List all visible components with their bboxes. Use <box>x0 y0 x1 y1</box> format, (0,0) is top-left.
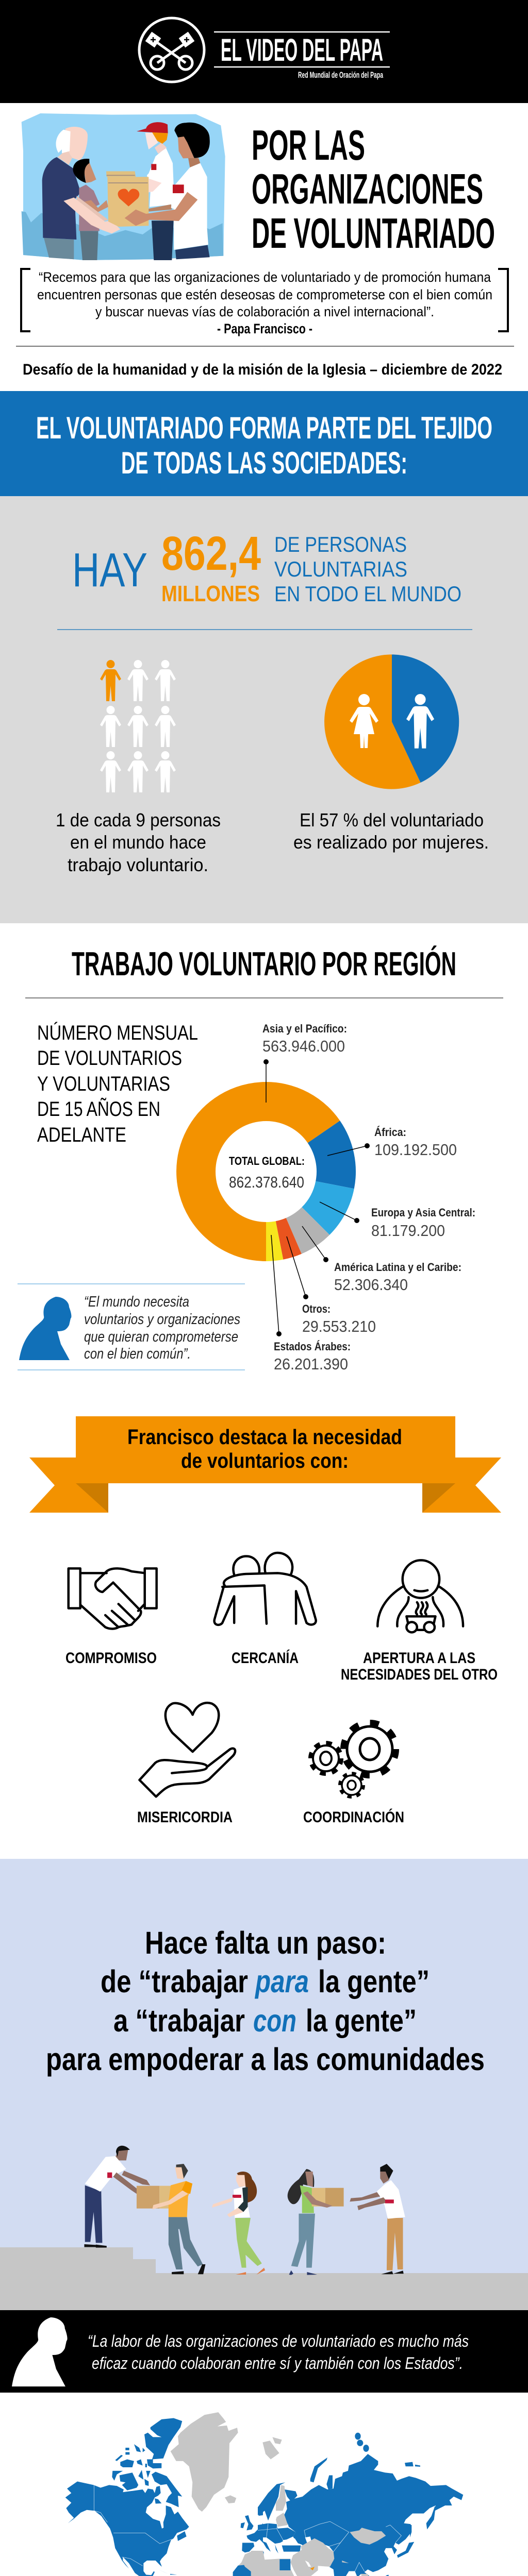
label: misericordia: MISERICORDIA <box>137 1809 233 1826</box>
Europe <box>258 2482 301 2560</box>
chart subtitle <box>37 1021 198 1146</box>
donut chart by region <box>196 1022 475 1373</box>
chart subtitle: NÚMERO MENSUAL <box>37 1021 198 1044</box>
big number statement <box>72 527 461 606</box>
person 1 <box>84 2146 150 2248</box>
label: Arab States: 26.201.390 <box>274 1355 348 1373</box>
banner: black quote <box>0 2310 528 2393</box>
title <box>252 121 495 257</box>
quote text <box>88 2332 469 2372</box>
Mongolia <box>350 2528 386 2545</box>
header band <box>0 0 528 103</box>
text: 57 percent: El 57 % del voluntariado <box>300 809 484 831</box>
pie chart: 57 % women <box>324 654 459 789</box>
label: Africa: África: <box>374 1126 406 1139</box>
label: Africa: 109.192.500 <box>374 1141 457 1159</box>
icon: handshake <box>69 1568 157 1629</box>
banner: blue heading <box>0 391 528 496</box>
stairs and ground <box>0 2247 528 2310</box>
West Africa <box>233 2551 263 2576</box>
icon: Pope silhouette blue <box>19 1297 71 1360</box>
label: Latin America <box>334 1261 461 1294</box>
prayer quote with brackets <box>21 269 508 336</box>
big number statement: VOLUNTARIAS <box>274 557 407 581</box>
label: Africa <box>374 1126 457 1159</box>
label: Asia: Asia y el Pacífico: <box>262 1022 347 1035</box>
text: 1 in 9: 1 de cada 9 personas <box>56 809 221 831</box>
label: Latin America: América Latina y el Caribe: <box>334 1261 461 1274</box>
chart subtitle: DE 15 AÑOS EN <box>37 1097 160 1121</box>
logo wordmark: EL VIDEO DEL PAPA <box>221 32 383 67</box>
statement text: para <box>254 1964 309 1999</box>
label: Others: Otros: <box>302 1302 331 1315</box>
prayer quote with brackets: - Papa Francisco - <box>217 321 312 336</box>
text: 57 percent <box>293 809 489 853</box>
ribbon banner: Francisco destaca la necesidad <box>127 1425 402 1449</box>
box 1 <box>137 2186 176 2209</box>
statement text: la gente” <box>306 2003 417 2038</box>
text: 1 in 9: en el mundo hace <box>70 832 206 853</box>
ribbon banner <box>29 1416 501 1513</box>
prayer quote with brackets: “Recemos para que las organizaciones de voluntariado y de promoción humana <box>39 269 491 285</box>
label: Europe: 81.179.200 <box>371 1222 445 1240</box>
Africa <box>251 2551 308 2576</box>
icon: Pope silhouette white <box>12 2317 68 2386</box>
donut centre total <box>229 1155 305 1191</box>
callout: Pope quote <box>18 1284 245 1370</box>
statement text: Hace falta un paso: <box>145 1925 386 1960</box>
person 3 <box>212 2172 265 2275</box>
label: Others <box>302 1302 376 1335</box>
label: cercania: CERCANÍA <box>232 1649 299 1667</box>
label: Arab States: Estados Árabes: <box>274 1340 351 1353</box>
person 2 <box>152 2164 205 2274</box>
donut centre total: TOTAL GLOBAL: <box>229 1155 305 1167</box>
panel: work with people <box>0 1859 528 2310</box>
big number statement: DE PERSONAS <box>274 532 407 556</box>
Middle East <box>290 2538 334 2576</box>
Southeast Asia and Oceania <box>342 2561 370 2576</box>
label: Asia: 563.946.000 <box>262 1037 345 1055</box>
borders <box>94 2485 192 2576</box>
chart subtitle: Y VOLUNTARIAS <box>37 1073 170 1095</box>
West Europe <box>241 2503 263 2552</box>
icon: embrace <box>214 1553 316 1625</box>
icon: woman <box>350 694 378 748</box>
panel: statistics on grey <box>0 496 528 923</box>
text: 57 percent: es realizado por mujeres. <box>293 832 489 853</box>
label: Arab States <box>274 1340 351 1373</box>
chart subtitle: DE VOLUNTARIOS <box>37 1047 182 1070</box>
prayer quote with brackets: y buscar nuevas vías de colaboración a nivel internacional”. <box>95 304 434 319</box>
statement text <box>46 1925 485 2077</box>
logo subtitle: Red Mundial de Oración del Papa <box>298 70 383 80</box>
leader lines <box>263 1059 370 1336</box>
quote text: voluntarios y organizaciones <box>84 1311 240 1328</box>
borders <box>258 2521 401 2576</box>
title: POR LAS <box>252 121 365 169</box>
statement text: de “trabajar <box>101 1964 248 1999</box>
label: Others: 29.553.210 <box>302 1317 376 1335</box>
person 4 <box>288 2169 344 2275</box>
quote text: eficaz cuando colaboran entre sí y también con los Estados”. <box>92 2354 463 2372</box>
text: 1 in 9 <box>56 809 221 875</box>
label: coordinacion: COORDINACIÓN <box>303 1808 404 1826</box>
map: world policies <box>65 2412 463 2576</box>
Eurasia, Africa, Oceania <box>251 2433 463 2576</box>
chart subtitle: ADELANTE <box>37 1124 126 1146</box>
big number statement: HAY <box>72 543 147 597</box>
person 5 <box>350 2164 405 2274</box>
label: compromiso: COMPROMISO <box>65 1650 157 1667</box>
icon: heart over hand <box>140 1703 235 1797</box>
donut centre total: 862.378.640 <box>229 1173 304 1191</box>
label: apertura: APERTURA A LAS <box>363 1650 475 1667</box>
logo rules <box>214 32 390 67</box>
quote text: que quieran comprometerse <box>84 1329 238 1345</box>
statement text: con <box>253 2003 296 2038</box>
icon: 1 in 9 people grid <box>100 660 176 792</box>
quote text: con el bien común”. <box>84 1346 191 1362</box>
text: 1 in 9: trabajo voluntario. <box>68 854 208 875</box>
big number statement: EN TODO EL MUNDO <box>274 582 461 606</box>
icon: person holding warm cup <box>377 1560 463 1632</box>
big number statement: MILLONES <box>161 581 260 606</box>
quote text <box>84 1294 240 1362</box>
ribbon banner: de voluntarios con: <box>181 1449 349 1472</box>
label: Europe <box>371 1206 475 1240</box>
prayer quote with brackets: encuentren personas que estén deseosas de comprometerse con el bien común <box>37 287 492 302</box>
illustration: volunteers hand over a box <box>22 113 225 260</box>
statement text: la gente” <box>318 1964 430 1999</box>
big number statement: 862,4 <box>161 527 261 580</box>
illustration: volunteers passing boxes <box>84 2146 405 2275</box>
statement text: a “trabajar <box>113 2003 245 2038</box>
label: Latin America: 52.306.340 <box>334 1276 408 1294</box>
label: Asia <box>262 1022 347 1055</box>
quote text: “El mundo necesita <box>84 1294 189 1310</box>
Americas <box>65 2412 263 2576</box>
icon: crossed keys logo <box>139 18 204 82</box>
icon: gears <box>311 1723 395 1797</box>
icon: man <box>406 694 434 749</box>
label: apertura <box>341 1650 498 1683</box>
label: Europe: Europa y Asia Central: <box>371 1206 475 1219</box>
